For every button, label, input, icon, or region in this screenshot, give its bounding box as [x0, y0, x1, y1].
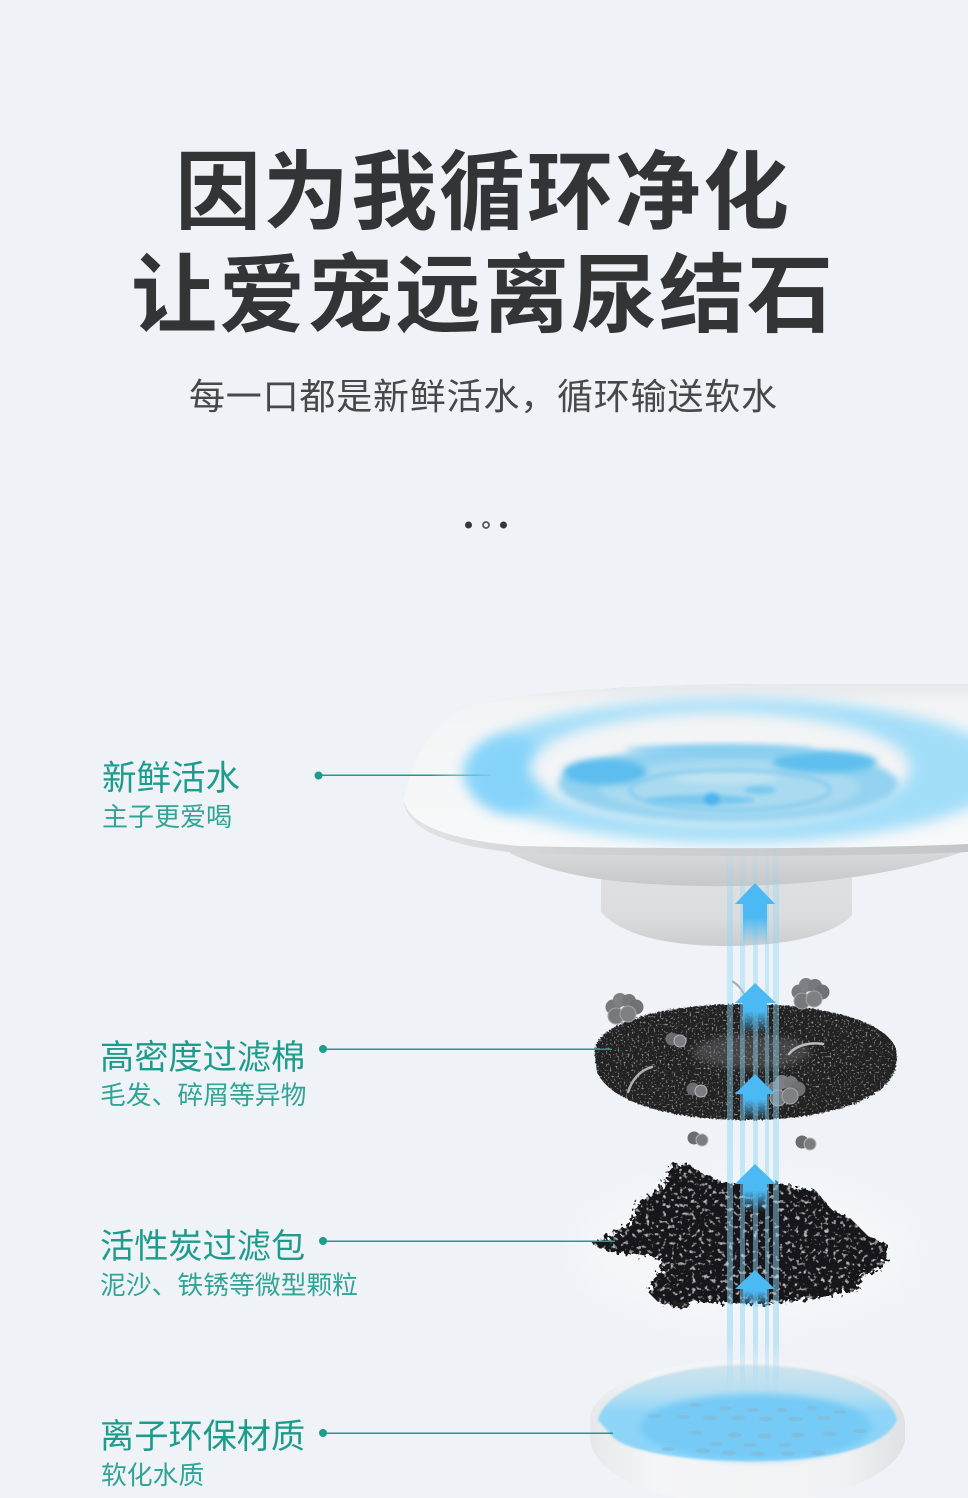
arrow 3 — [735, 1074, 775, 1120]
label: sponge — [100, 1039, 306, 1110]
arrow 2 — [735, 983, 776, 1034]
label: carbon: 泥沙、铁锈等微型颗粒 — [100, 1271, 358, 1300]
title: 因为我循环净化 — [175, 145, 791, 241]
infographic — [101, 148, 968, 1486]
leader: ion ring — [319, 1429, 613, 1437]
label: fresh water: 新鲜活水 — [102, 760, 240, 798]
hair strands — [628, 1067, 652, 1092]
subtitle: 每一口都是新鲜活水，循环输送软水 — [189, 376, 778, 417]
sponge filter disc — [595, 978, 897, 1150]
white inner ring — [530, 712, 910, 824]
particles — [666, 1032, 686, 1047]
water streams — [727, 845, 779, 1395]
arrow 1 — [735, 883, 775, 945]
title — [131, 145, 835, 344]
label: ion ring — [100, 1418, 305, 1490]
leader: carbon — [319, 1237, 615, 1245]
arrow 4 — [735, 1164, 776, 1212]
water bowl — [404, 684, 968, 946]
bowl underside — [510, 840, 968, 886]
leader: sponge — [319, 1045, 612, 1053]
leader: fresh water — [314, 772, 490, 780]
inner pool — [640, 1394, 872, 1460]
decorative dots — [465, 522, 507, 528]
label: carbon: 活性炭过滤包 — [100, 1228, 305, 1266]
label: carbon — [100, 1228, 358, 1300]
label: fresh water: 主子更爱喝 — [102, 802, 232, 832]
reservoir dish — [590, 1360, 905, 1498]
dish body — [590, 1360, 905, 1498]
label: ion ring: 离子环保材质 — [100, 1418, 305, 1456]
pool holes — [648, 1403, 867, 1456]
label: ion ring: 软化水质 — [101, 1461, 204, 1490]
bowl rim — [404, 684, 968, 856]
activated carbon pile — [592, 1164, 888, 1308]
arrow 5 — [735, 1270, 775, 1308]
carbon glow — [580, 1178, 910, 1322]
label: fresh water — [102, 760, 240, 832]
sponge centre highlight — [694, 1035, 810, 1069]
water surface — [598, 1365, 897, 1461]
blue water ring — [463, 699, 968, 843]
label: sponge: 高密度过滤棉 — [100, 1039, 305, 1077]
central pool — [558, 745, 898, 822]
label: sponge: 毛发、碎屑等异物 — [100, 1081, 306, 1110]
bowl base — [601, 875, 852, 946]
title: 让爱宠远离尿结石 — [131, 248, 835, 344]
